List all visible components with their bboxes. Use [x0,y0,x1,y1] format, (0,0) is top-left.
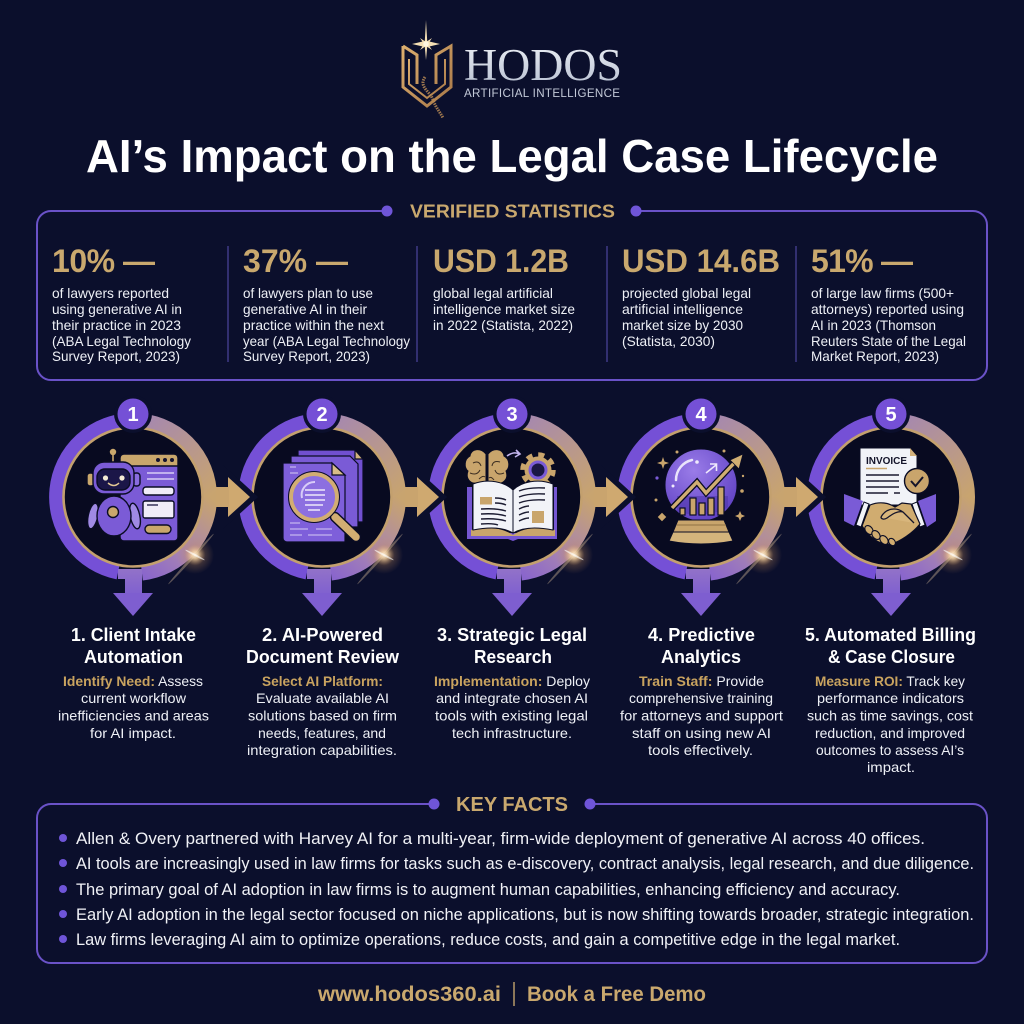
logo: Hodos Artificial Intelligence [403,20,622,118]
step 2 text [246,625,400,758]
stat: 10% [52,243,191,364]
icon: brain, gear and open book [465,450,557,541]
stat: USD 1.2B [433,243,575,333]
title: AI’s Impact on the Legal Case Lifecycle [86,130,938,182]
stat: USD 1.2B: USD 1.2B [433,243,569,279]
stat: USD 14.6B: USD 14.6B [622,243,780,279]
step 4 text [620,625,783,758]
step 1 ring and icon: 1 [127,404,139,426]
arrow: step 2 to step 3 [405,477,439,517]
step 4 ring and icon [624,395,783,616]
stat: 10%: 10% — [52,243,155,279]
stat: 51% [811,243,966,364]
stat: USD 14.6B: market size by 2030 [622,317,743,333]
step 5 text [805,625,976,775]
step 4 text: 4. Predictive [648,625,755,645]
stat: 51%: attorneys) reported using [811,301,964,317]
step 1 ring and icon [56,395,215,616]
arrow: step 3 to step 4 [594,477,628,517]
icon: star sparkle [412,20,440,60]
step 2 text: Document Review [246,647,400,667]
step 1 text: for AI impact. [90,725,176,741]
icon: shield H emblem [403,46,451,118]
stat: 10%: their practice in 2023 [52,317,181,333]
heading: verified statistics: VERIFIED STATISTICS [410,202,615,222]
stat: 51%: 51% — [811,243,913,279]
step 2 ring and icon [245,395,404,616]
step 5 text: impact. [867,759,915,775]
step 3 text: Implementation: Deploy [434,673,590,689]
step 3 text: 3. Strategic Legal [437,625,587,645]
step 4 text: Train Staff: Provide [639,673,764,689]
bullet list: AI tools are increasingly used in law firms for tasks such as e-discovery, contract analysis, legal research, and due diligence. [76,854,974,873]
bullet list: Allen & Overy partnered with Harvey AI for a multi-year, firm-wide deployment of generative AI across 40 offices. [76,829,925,848]
bullet list: Law firms leveraging AI aim to optimize operations, reduce costs, and gain a competitive edge in the legal market. [76,930,900,949]
stat: 10%: of lawyers reported [52,285,169,301]
step 1 text: Identify Need: Assess [63,673,203,689]
step 5 text: outcomes to assess AI’s [816,742,964,758]
step 4 text: Analytics [661,647,741,667]
step 4 text: comprehensive training [629,690,773,706]
stat: USD 14.6B: artificial intelligence [622,301,743,317]
stat: 10%: Survey Report, 2023) [52,348,180,364]
bullet list [59,829,974,949]
icon: documents under magnifying glass [283,450,363,542]
stat: USD 1.2B: in 2022 (Statista, 2022) [433,317,573,333]
icon: crystal ball with rising chart [654,449,745,544]
step 4 ring and icon: 4 [695,404,707,426]
footer: website and call to action: www.hodos360.ai [317,983,501,1006]
step 5 text: reduction, and improved [815,725,965,741]
step 2 text: integration capabilities. [247,742,397,758]
bullet list: Early AI adoption in the legal sector focused on niche applications, but is now shifting towards broader, strategic integration. [76,905,974,924]
stat: USD 1.2B: global legal artificial [433,285,553,301]
step 3 text: Research [474,647,552,667]
stat: 51%: Market Report, 2023) [811,348,939,364]
bullet list: The primary goal of AI adoption in law firms is to augment human capabilities, enhancing efficiency and accuracy. [76,880,900,899]
step 2 text: solutions based on firm [248,708,397,724]
step 1 text [58,625,209,741]
icon: invoice and handshake: INVOICE [866,455,907,467]
stat: 37%: generative AI in their [243,301,367,317]
stat: 37% [243,243,410,364]
stat: 51%: AI in 2023 (Thomson [811,317,936,333]
stat: USD 14.6B [622,243,780,349]
icon: invoice and handshake [844,448,936,547]
step 5 ring and icon [814,395,973,616]
stat: 37%: Survey Report, 2023) [243,348,370,364]
step 4 text: staff on using new AI [632,725,771,741]
stat: 37%: of lawyers plan to use [243,285,373,301]
footer: website and call to action [317,982,706,1006]
stat: USD 14.6B: projected global legal [622,285,751,301]
stat: USD 14.6B: (Statista, 2030) [622,333,715,349]
step 5 text: 5. Automated Billing [805,625,976,645]
step 3 ring and icon [435,395,594,616]
step 2 text: needs, features, and [258,725,386,741]
step 2 text: 2. AI-Powered [262,625,383,645]
step 1 text: Automation [84,647,183,667]
step 5 text: performance indicators [817,690,964,706]
panel: verified statistics [37,202,987,380]
stat: 51%: Reuters State of the Legal [811,333,966,349]
panel: key facts [37,794,987,963]
step 3 ring and icon: 3 [506,404,518,426]
step 3 text: tech infrastructure. [452,725,572,741]
step 5 text: Measure ROI: Track key [815,673,965,689]
stat: 10%: using generative AI in [52,301,182,317]
step 1 text: 1. Client Intake [71,625,196,645]
wordmark: HODOS [464,40,622,90]
step 5 ring and icon: 5 [885,404,897,426]
step 3 text: and integrate chosen AI [436,690,588,706]
icon: robot and intake form [86,449,178,541]
step 3 text [434,625,590,741]
footer: website and call to action: Book a Free Demo [527,983,706,1006]
step 3 text: tools with existing legal [435,708,588,724]
step 2 text: Evaluate available AI [256,690,389,706]
stat: 51%: of large law firms (500+ [811,285,954,301]
step 1 text: current workflow [81,690,187,706]
tagline: ARTIFICIAL INTELLIGENCE [464,87,620,100]
stat: USD 1.2B: intelligence market size [433,301,575,317]
stat: 37%: year (ABA Legal Technology [243,333,410,349]
step 1 text: inefficiencies and areas [58,708,209,724]
arrow: step 1 to step 2 [216,477,250,517]
stat: 10%: (ABA Legal Technology [52,333,191,349]
step 4 text: tools effectively. [648,742,753,758]
stat: 37%: 37% — [243,243,348,279]
step 4 text: for attorneys and support [620,708,783,724]
stat: 37%: practice within the next [243,317,384,333]
heading: key facts: KEY FACTS [456,794,568,816]
step 2 ring and icon: 2 [316,404,328,426]
step 5 text: & Case Closure [828,647,955,667]
arrow: step 4 to step 5 [784,477,818,517]
step 2 text: Select AI Platform: [262,673,383,689]
step 5 text: such as time savings, cost [807,708,973,724]
